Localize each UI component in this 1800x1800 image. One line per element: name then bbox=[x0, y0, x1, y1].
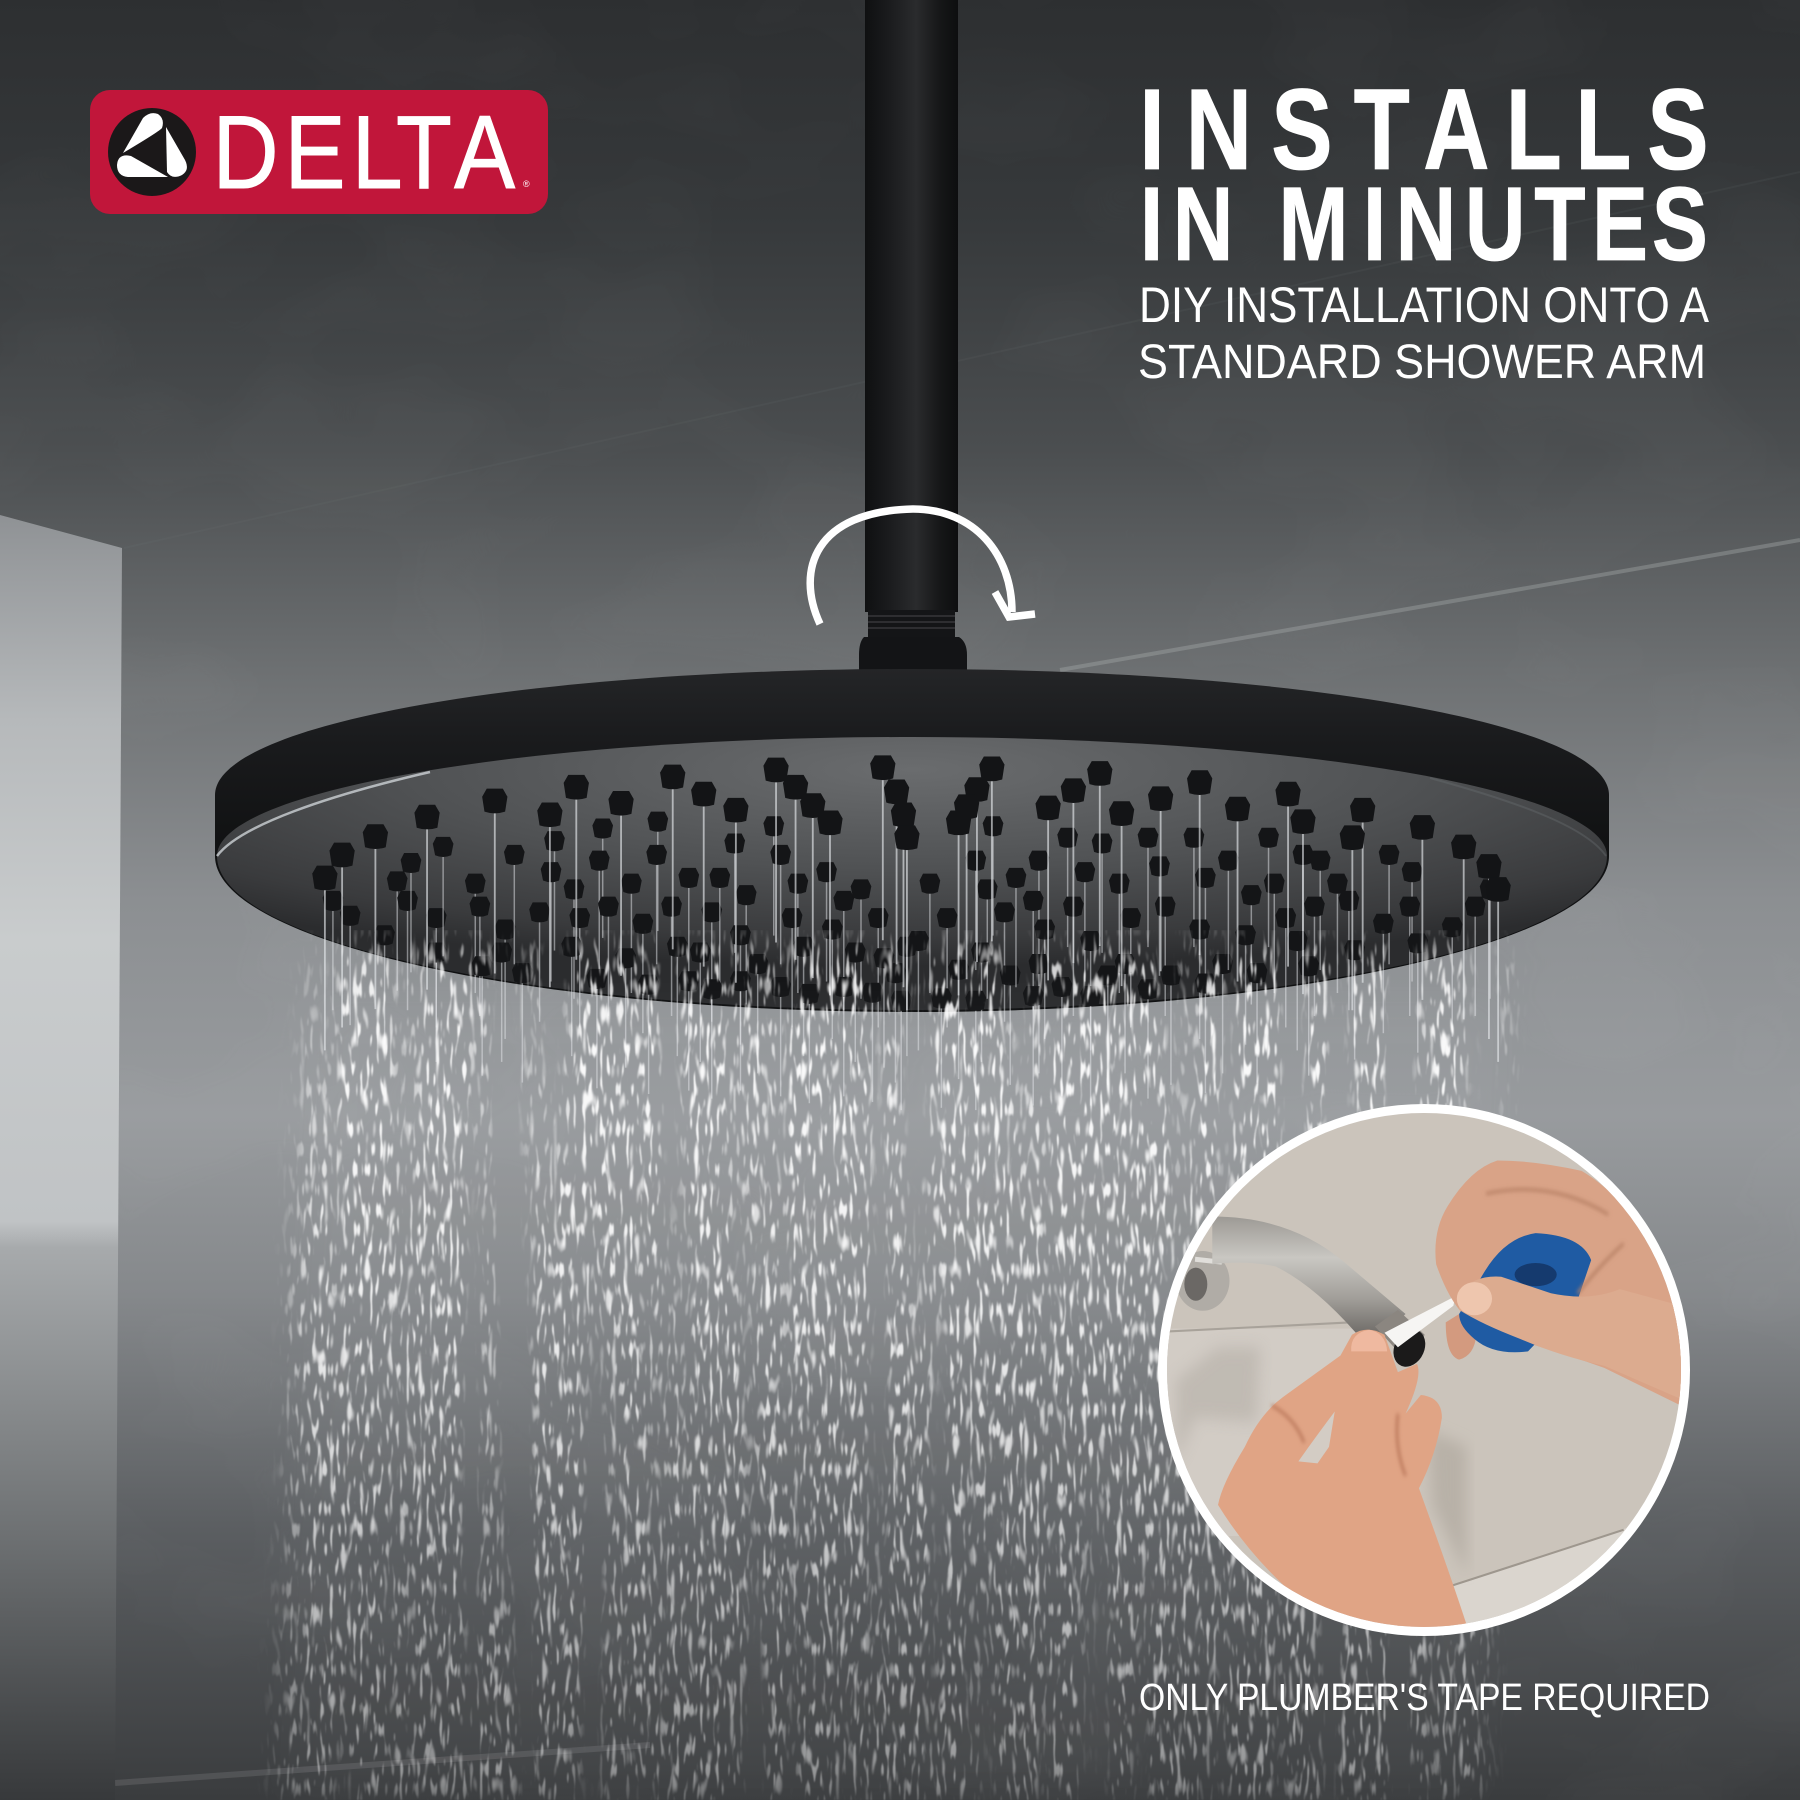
blue tape roll bbox=[1459, 1233, 1591, 1352]
rim of head bbox=[215, 669, 1609, 1012]
logo: Delta bbox=[90, 90, 548, 214]
shower arm flange bbox=[1176, 1251, 1230, 1311]
nozzles with water streams bbox=[312, 755, 1511, 1110]
subtitle bbox=[1138, 277, 1710, 389]
rotation arrow bbox=[810, 509, 1035, 624]
right hand bbox=[1435, 1161, 1689, 1409]
registered mark: ® bbox=[523, 179, 530, 189]
gap between fingers bbox=[1298, 1412, 1335, 1463]
right hand crease bbox=[1486, 1189, 1624, 1293]
falling water spray bbox=[250, 930, 1530, 1800]
left thumbnail bbox=[1351, 1330, 1387, 1351]
thread and black tip bbox=[1375, 1316, 1426, 1367]
subtitle: DIY INSTALLATION ONTO A bbox=[1139, 277, 1710, 333]
logo emblem bbox=[108, 108, 196, 196]
left hand crease bbox=[1272, 1405, 1406, 1476]
logo red badge bbox=[90, 90, 548, 214]
title bbox=[1139, 66, 1709, 283]
title line 1: INSTALLS bbox=[1139, 66, 1709, 194]
white tape strip bbox=[1384, 1296, 1455, 1347]
subtitle: STANDARD SHOWER ARM bbox=[1138, 336, 1706, 389]
left hand bbox=[1218, 1330, 1467, 1634]
caption: ONLY PLUMBER'S TAPE REQUIRED bbox=[1139, 1677, 1710, 1719]
title line 2: INMINUTES bbox=[1140, 166, 1708, 283]
right thumbnail bbox=[1457, 1282, 1492, 1315]
shower arm pipe bbox=[859, 0, 967, 672]
chrome shower arm bbox=[1212, 1217, 1406, 1335]
shower head bbox=[215, 669, 1609, 1110]
logo wordmark: DELTA bbox=[213, 94, 516, 210]
underside plate bbox=[217, 737, 1607, 1010]
left side wall panel bbox=[0, 515, 122, 1800]
wall tiles and shadows bbox=[1167, 1322, 1626, 1624]
inset photo: applying plumber's tape bbox=[1150, 1100, 1700, 1650]
right hand thumb bbox=[1457, 1276, 1681, 1399]
right hand lower finger bbox=[1446, 1314, 1476, 1360]
